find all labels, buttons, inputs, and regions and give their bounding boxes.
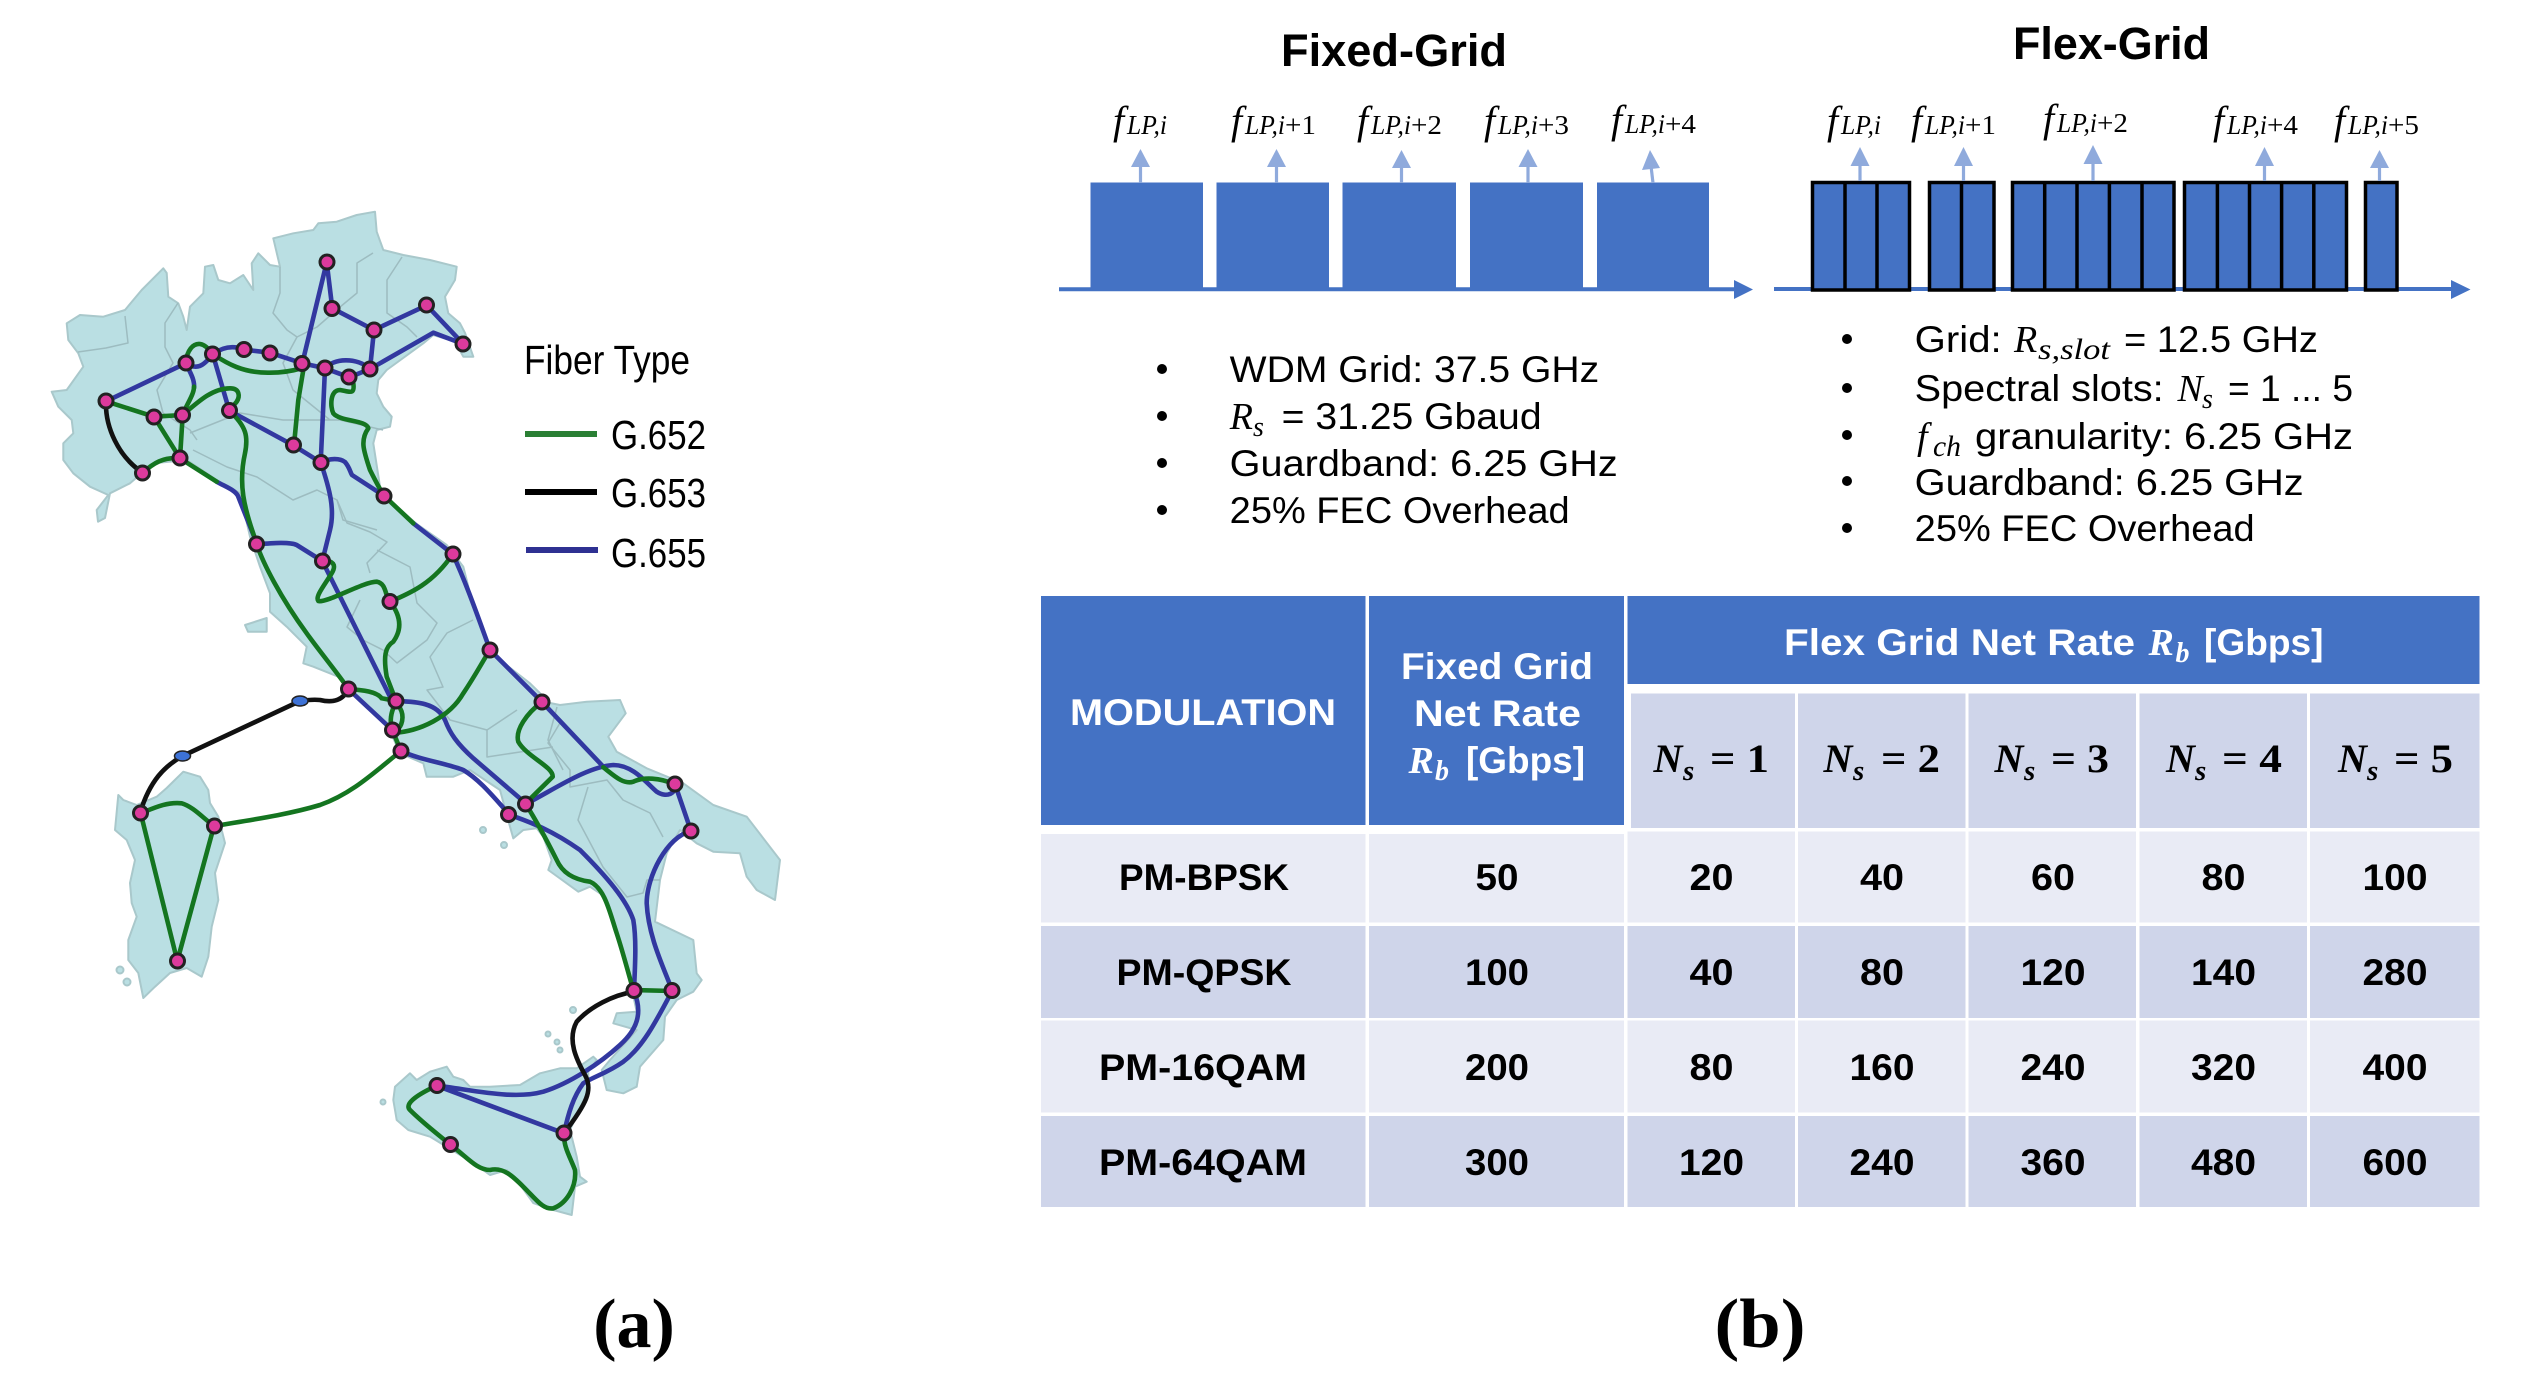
caption a: (a) xyxy=(593,1286,675,1363)
flex grid parameters list: 25% FEC Overhead xyxy=(1915,508,2255,549)
flex grid parameters list: s xyxy=(2202,384,2213,415)
row: PM-QPSK: 100 xyxy=(1465,952,1529,993)
flex grid parameters list xyxy=(1842,319,2353,549)
Ns labels: = 2 xyxy=(1881,736,1940,781)
fixed grid parameters list: 25% FEC Overhead xyxy=(1230,490,1570,531)
header text: [Gbps] xyxy=(1466,740,1585,781)
heading: Flex-Grid: Flex-Grid xyxy=(2013,18,2210,69)
row: PM-16QAM: 160 xyxy=(1850,1047,1914,1088)
frequency labels: +1 xyxy=(1285,110,1316,140)
frequency labels: f xyxy=(2213,98,2229,143)
row: PM-64QAM xyxy=(1099,1142,2428,1183)
frequency labels: +5 xyxy=(2388,110,2419,140)
row: PM-16QAM: 320 xyxy=(2191,1047,2256,1088)
panel a: fiber map of Italy xyxy=(52,212,780,1215)
Ns labels: s xyxy=(1682,755,1694,787)
fixed grid parameters list: = 31.25 Gbaud xyxy=(1282,396,1542,437)
network nodes xyxy=(99,255,698,1152)
header text: [Gbps] xyxy=(2204,622,2324,663)
legend: fiber type: Fiber Type xyxy=(524,337,690,383)
row: PM-16QAM: 240 xyxy=(2020,1047,2086,1088)
row: PM-64QAM: 480 xyxy=(2191,1142,2256,1183)
row: PM-16QAM: PM-16QAM xyxy=(1099,1047,1307,1088)
header text xyxy=(1070,622,2324,787)
row: PM-16QAM: 80 xyxy=(1690,1047,1734,1088)
frequency labels: +2 xyxy=(1411,110,1442,140)
row: PM-BPSK: PM-BPSK xyxy=(1119,857,1289,898)
row: PM-BPSK xyxy=(1119,857,2428,898)
Ns labels: N xyxy=(1994,736,2026,781)
frequency labels: +4 xyxy=(2267,110,2299,140)
row: PM-QPSK: 120 xyxy=(2020,952,2086,993)
heading: Fixed-Grid: Fixed-Grid xyxy=(1281,25,1507,76)
row: PM-QPSK: 80 xyxy=(1860,952,1904,993)
frequency labels xyxy=(1827,96,2419,143)
center frequency arrows xyxy=(1131,149,1660,183)
row: PM-QPSK: 40 xyxy=(1690,952,1734,993)
flex grid parameters list: = 1 ... 5 xyxy=(2228,368,2353,409)
frequency labels: +4 xyxy=(1665,109,1697,139)
frequency labels: LP,i xyxy=(1126,110,1167,140)
Ns labels: = 5 xyxy=(2394,736,2453,781)
frequency labels: f xyxy=(1611,97,1627,142)
row: PM-QPSK xyxy=(1116,952,2428,993)
flex grid parameters list: ch xyxy=(1933,430,1961,463)
Ns labels: s xyxy=(2023,755,2035,787)
Ns labels: N xyxy=(1652,736,1684,781)
row: PM-64QAM: 300 xyxy=(1465,1142,1529,1183)
row: PM-BPSK: 50 xyxy=(1476,857,1518,898)
frequency labels: f xyxy=(1484,98,1500,143)
Ns labels: = 3 xyxy=(2051,736,2109,781)
flex grid parameters list: Spectral slots: xyxy=(1915,368,2164,409)
Ns labels: = 4 xyxy=(2222,736,2282,781)
header text: R xyxy=(1408,740,1434,782)
frequency labels: f xyxy=(1357,98,1373,143)
header text: b xyxy=(2176,638,2190,669)
header text: Net Rate xyxy=(1414,693,1581,734)
table: net rates xyxy=(1041,596,2480,1207)
frequency labels: LP,i xyxy=(1840,110,1881,140)
frequency labels: LP,i xyxy=(1624,109,1665,139)
flex grid parameters list: N xyxy=(2176,368,2206,410)
legend: fiber type: G.653 xyxy=(611,470,706,516)
Ns labels: s xyxy=(1852,755,1864,787)
frequency labels: LP,i xyxy=(1244,110,1285,140)
header text: Flex Grid Net Rate xyxy=(1784,622,2135,663)
frequency labels: LP,i xyxy=(2226,110,2267,140)
row: PM-BPSK: 40 xyxy=(1860,857,1904,898)
flex grid parameters list: Grid: xyxy=(1915,319,2002,360)
caption b: (b) xyxy=(1714,1286,1806,1363)
Ns labels: s xyxy=(2194,755,2206,787)
frequency labels: LP,i xyxy=(1924,110,1965,140)
fixed grid parameters list: WDM Grid: 37.5 GHz xyxy=(1230,349,1599,390)
row: PM-QPSK: 280 xyxy=(2362,952,2428,993)
header text: R xyxy=(2148,622,2174,664)
alternate body cells xyxy=(1041,926,2480,1207)
land: Italy map xyxy=(52,212,780,1215)
flex grid parameters list: R xyxy=(2013,319,2037,361)
frequency labels: f xyxy=(2334,98,2350,143)
Ns labels xyxy=(1652,736,2453,787)
G.655 blue links xyxy=(106,262,691,1133)
Ns header cells xyxy=(1631,694,2480,828)
fixed grid parameters list: s xyxy=(1253,412,1264,443)
frequency labels: LP,i xyxy=(2056,108,2097,138)
frequency labels xyxy=(1113,97,1697,143)
flex grid parameters list: s,slot xyxy=(2038,333,2111,366)
row: PM-BPSK: 100 xyxy=(2362,857,2428,898)
row: PM-64QAM: 360 xyxy=(2020,1142,2086,1183)
row: PM-16QAM: 400 xyxy=(2362,1047,2428,1088)
frequency labels: f xyxy=(1113,98,1129,143)
frequency labels: +2 xyxy=(2097,108,2128,138)
header text: Fixed Grid xyxy=(1401,646,1593,687)
row: PM-BPSK: 80 xyxy=(2202,857,2246,898)
frequency labels: +1 xyxy=(1965,110,1996,140)
row: PM-BPSK: 20 xyxy=(1690,857,1734,898)
Ns labels: s xyxy=(2366,755,2378,787)
flex grid parameters list: f xyxy=(1917,416,1932,458)
header cells xyxy=(1041,596,2480,825)
row: PM-QPSK: PM-QPSK xyxy=(1116,952,1292,993)
flex grid parameters list: Guardband: 6.25 GHz xyxy=(1915,462,2304,503)
panel: flex grid xyxy=(1774,18,2470,549)
regional borders xyxy=(78,253,663,897)
header text: MODULATION xyxy=(1070,692,1336,733)
frequency labels: f xyxy=(1827,98,1843,143)
legend: fiber type xyxy=(524,337,706,576)
legend: fiber type: G.655 xyxy=(611,530,706,576)
row: PM-16QAM xyxy=(1099,1047,2428,1088)
center frequency arrows xyxy=(1850,145,2389,181)
body cells xyxy=(1041,832,2480,1112)
frequency labels: LP,i xyxy=(1370,110,1411,140)
panel: fixed grid xyxy=(1059,25,1753,531)
Ns labels: N xyxy=(2337,736,2369,781)
frequency labels: LP,i xyxy=(1497,110,1538,140)
row: PM-QPSK: 140 xyxy=(2191,952,2256,993)
row: PM-64QAM: 600 xyxy=(2362,1142,2428,1183)
G.652 green links xyxy=(106,344,675,1208)
fixed channel bars xyxy=(1090,182,1709,291)
flex grid parameters list: = 12.5 GHz xyxy=(2124,319,2318,360)
frequency labels: f xyxy=(2043,96,2059,141)
frequency axis xyxy=(1774,280,2470,299)
row: PM-16QAM: 200 xyxy=(1465,1047,1529,1088)
fixed grid parameters list: Guardband: 6.25 GHz xyxy=(1230,443,1618,484)
frequency labels: f xyxy=(1231,98,1247,143)
Ns labels: = 1 xyxy=(1710,736,1769,781)
fixed grid parameters list: R xyxy=(1229,396,1253,438)
row: PM-64QAM: 120 xyxy=(1679,1142,1744,1183)
G.653 black links xyxy=(106,401,634,1133)
row: PM-64QAM: PM-64QAM xyxy=(1099,1142,1307,1183)
frequency axis xyxy=(1059,280,1753,299)
header text: b xyxy=(1435,756,1449,787)
Ns labels: N xyxy=(2165,736,2197,781)
frequency labels: f xyxy=(1911,98,1927,143)
flex grid parameters list: granularity: 6.25 GHz xyxy=(1975,416,2353,457)
legend: fiber type: G.652 xyxy=(611,412,706,458)
frequency labels: LP,i xyxy=(2347,110,2388,140)
row: PM-BPSK: 60 xyxy=(2031,857,2075,898)
fixed grid parameters list xyxy=(1157,349,1618,531)
Ns labels: N xyxy=(1822,736,1854,781)
frequency labels: +3 xyxy=(1538,110,1569,140)
row: PM-64QAM: 240 xyxy=(1850,1142,1914,1183)
flex channel blocks xyxy=(1812,182,2397,290)
